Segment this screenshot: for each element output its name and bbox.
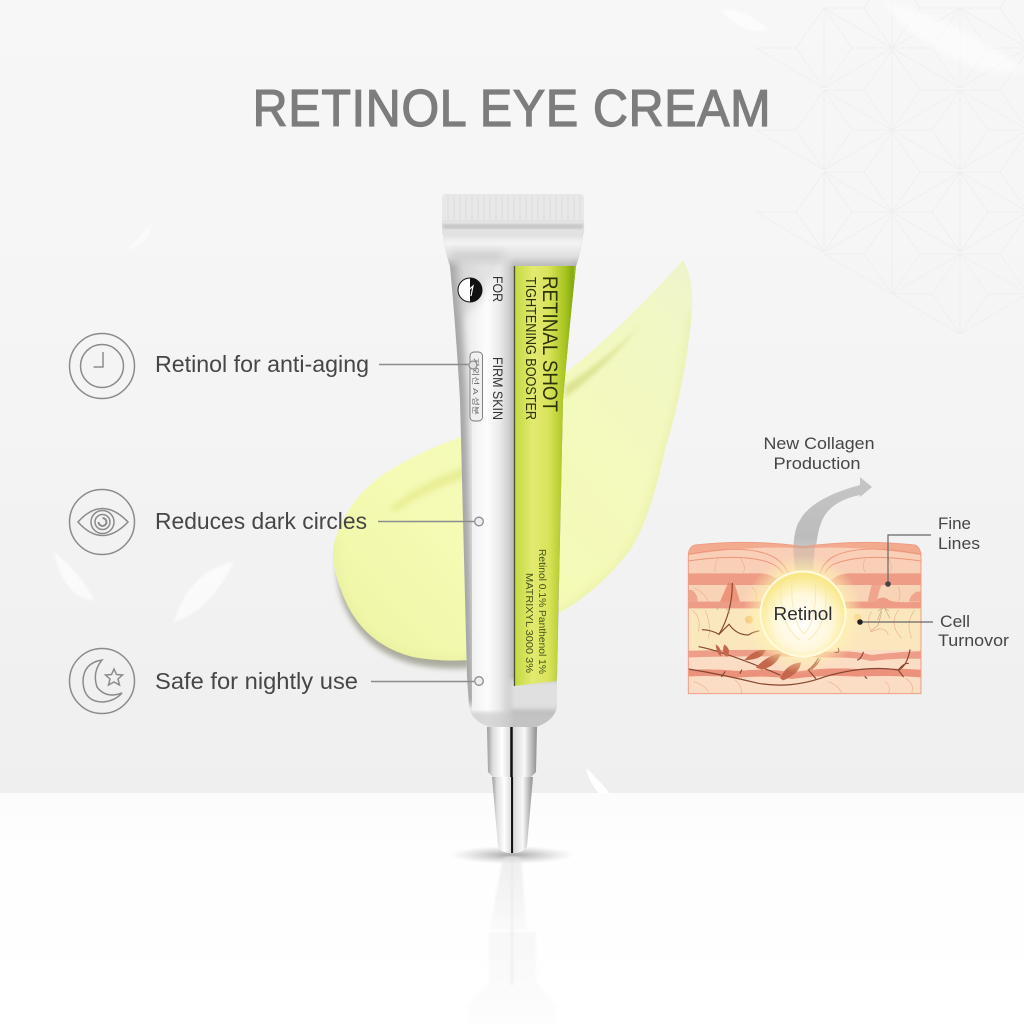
- callout line: dark circles: [378, 517, 483, 526]
- pointer: cell turnover: [857, 619, 933, 625]
- label: cell turnover: Cell: [940, 612, 970, 631]
- icon: moon and star: [70, 648, 134, 714]
- skin cross-section: [688, 542, 922, 694]
- top skin surface bands: [688, 542, 921, 555]
- background geometric pattern: [756, 0, 1024, 334]
- metal nozzle tip: [492, 777, 533, 853]
- skin diagram panel: [685, 434, 1009, 702]
- product tube: [440, 194, 586, 853]
- callout line: anti-aging: [379, 361, 477, 369]
- icon: eye: [70, 490, 134, 554]
- label: cell turnover: Turnovor: [938, 631, 1009, 650]
- follicle and fibres: [720, 582, 740, 602]
- capsule tag: 자외선 A 성분: [471, 358, 481, 415]
- arrow overlay into skin: [793, 546, 815, 570]
- feature text: anti-aging: Retinol for anti-aging: [155, 351, 369, 377]
- heading: new collagen production: New Collagen: [764, 434, 874, 453]
- feature text: nightly use: Safe for nightly use: [155, 668, 358, 694]
- capsule tag: [470, 352, 482, 421]
- tube body: [443, 234, 583, 727]
- heading: new collagen production: Production: [774, 454, 860, 473]
- pointer: fine lines: [885, 535, 931, 587]
- tube shading: [440, 233, 586, 730]
- red tissue bands: [685, 573, 778, 585]
- collagen arrow: [793, 477, 872, 570]
- retinol bubble: [760, 572, 846, 656]
- label: fine lines: Fine: [938, 514, 971, 533]
- background wall: [0, 0, 1024, 794]
- decorative petals: [54, 0, 1024, 794]
- nozzle reflection: [468, 856, 556, 1024]
- title: RETINOL EYE CREAM: [253, 79, 771, 137]
- label: fine lines: Lines: [938, 534, 980, 553]
- product name: RETINAL SHOT: [538, 276, 561, 412]
- label text: firm skin: FIRM SKIN: [490, 357, 506, 420]
- label edge: [514, 266, 516, 686]
- skin outline: [688, 542, 921, 694]
- feature text: dark circles: Reduces dark circles: [155, 508, 367, 534]
- leaf-shaped muscle cells: [716, 644, 821, 680]
- retinol glow: [743, 554, 863, 674]
- yellow nodules: [745, 616, 753, 624]
- ingredient line 1: Retinol 0.1% Panthenol 1%: [536, 549, 548, 674]
- callout line: nightly: [371, 677, 483, 685]
- label text: for: FOR: [490, 276, 506, 302]
- green label: [514, 266, 576, 686]
- brand logo: [458, 278, 482, 302]
- tube cap: [442, 194, 584, 234]
- floor shadow under nozzle: [450, 846, 574, 864]
- product subtitle: TIGHTENING BOOSTER: [522, 277, 539, 420]
- icon: clock: [70, 334, 134, 398]
- floor: [0, 793, 1024, 1024]
- ingredient line 2: MATRIXYL 3000 3%: [523, 573, 535, 673]
- epidermis cell outlines: [692, 558, 915, 693]
- cream swatch: [333, 260, 692, 668]
- retinol label: Retinol: [774, 604, 832, 624]
- metal nozzle collar: [487, 727, 537, 778]
